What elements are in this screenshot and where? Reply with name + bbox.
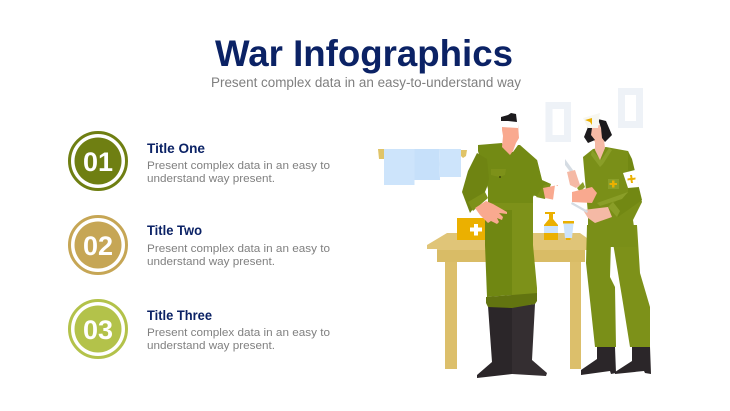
- head bandage: [501, 120, 518, 128]
- wall windows: [549, 92, 640, 138]
- heading: title three: Title Three: [147, 307, 212, 323]
- number badge 03: [70, 300, 126, 358]
- number badge 03: 03: [83, 315, 113, 345]
- right sleeve: [608, 151, 642, 217]
- bandage: [553, 185, 572, 202]
- number badge 01: [70, 132, 126, 190]
- illustration: medic bandaging soldier: [378, 92, 651, 378]
- collar: [591, 148, 612, 167]
- item 1: title one: [70, 132, 330, 190]
- soldier bandaged arm: [530, 160, 597, 203]
- title: War Infographics: [215, 33, 513, 74]
- trousers: [485, 205, 513, 297]
- left leg: [586, 225, 616, 347]
- neck and face: [590, 125, 605, 160]
- forearm: [543, 185, 558, 200]
- neck and face: [502, 122, 519, 155]
- table: [427, 233, 587, 369]
- belt: [488, 203, 533, 210]
- sleeve cuff: [536, 184, 550, 199]
- shirt: [583, 147, 642, 247]
- hair: [501, 113, 517, 122]
- description three: [147, 327, 330, 352]
- description three: understand way present.: [147, 340, 275, 352]
- pocket: [491, 169, 506, 177]
- bottle and cup: [544, 212, 574, 240]
- soldier body: [462, 113, 547, 378]
- scissors: [565, 159, 573, 173]
- sleeve: [530, 160, 551, 198]
- sleeve cuff: [608, 202, 620, 217]
- heading: title two: Title Two: [147, 222, 202, 238]
- heading: title one: Title One: [147, 140, 205, 156]
- right boot: [512, 304, 547, 376]
- subtitle: Present complex data in an easy-to-understand way: [211, 75, 521, 90]
- shirt: [478, 143, 542, 209]
- armband: [623, 170, 639, 188]
- number badge 02: [70, 216, 126, 274]
- left arm: [462, 153, 489, 213]
- number badge 01: 01: [83, 147, 113, 177]
- medic: [565, 113, 651, 375]
- description one: understand way present.: [147, 173, 275, 185]
- description two: [147, 243, 330, 268]
- upper hand: [567, 170, 580, 188]
- left shoe: [581, 347, 616, 375]
- first aid box: [457, 218, 487, 240]
- trouser cuffs: [486, 293, 537, 308]
- towel rack with towels: [378, 149, 467, 185]
- description three: Present complex data in an easy to: [147, 327, 330, 339]
- item 3: title three: [70, 300, 330, 358]
- description one: [147, 160, 330, 185]
- description one: Present complex data in an easy to: [147, 160, 330, 172]
- number badge 02: 02: [83, 231, 113, 261]
- right shoe: [615, 347, 651, 374]
- upper cuff: [577, 182, 585, 192]
- left cuff: [468, 192, 488, 211]
- pocket badge: [608, 179, 619, 189]
- left boot: [477, 306, 513, 378]
- item 2: title two: [70, 216, 330, 274]
- lower hand: [583, 207, 612, 223]
- hand on hip: [475, 201, 507, 224]
- nurse cap: [583, 113, 600, 128]
- description two: understand way present.: [147, 256, 275, 268]
- sleeve fold: [597, 192, 628, 206]
- hair: [598, 119, 612, 142]
- right leg: [611, 225, 650, 347]
- bandage tail: [571, 202, 588, 213]
- description two: Present complex data in an easy to: [147, 243, 330, 255]
- hand: [572, 187, 597, 203]
